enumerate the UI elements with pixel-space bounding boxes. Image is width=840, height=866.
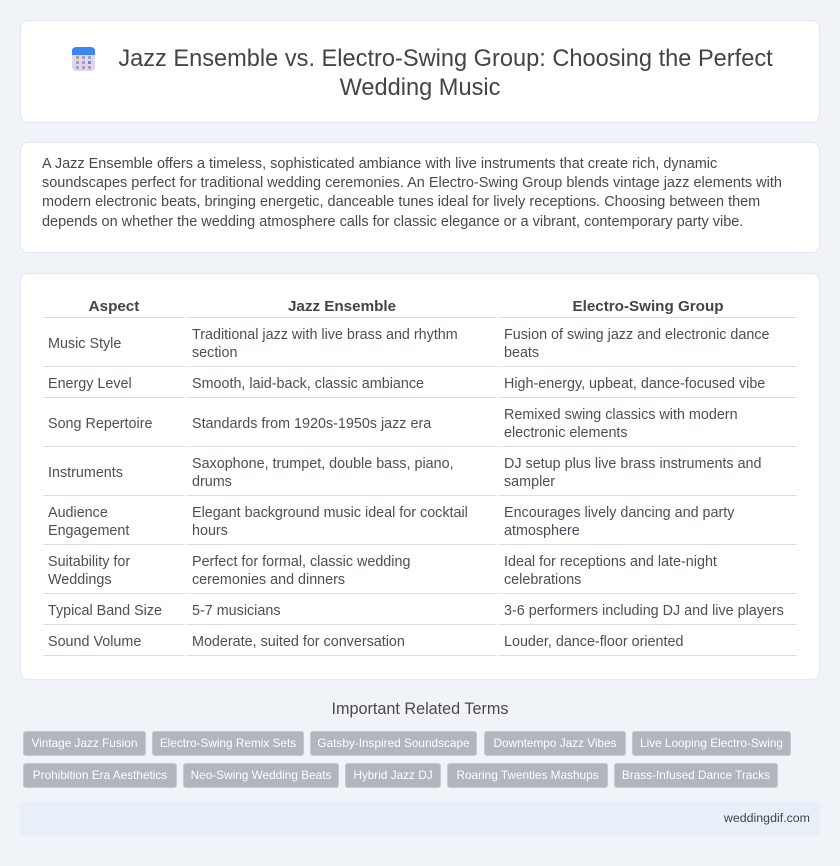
intro text xyxy=(42,156,782,230)
icon: calendar xyxy=(72,47,95,71)
row: Energy Level: Energy Level xyxy=(48,376,132,392)
tag: Prohibition Era Aesthetics xyxy=(33,768,167,782)
panel: title header xyxy=(20,20,820,123)
tag: Electro-Swing Remix Sets xyxy=(160,736,296,750)
table header: Aspect xyxy=(89,298,139,315)
row: Song Repertoire: Standards from 1920s-1950s jazz era xyxy=(192,416,431,432)
row: Audience Engagement: Engagement xyxy=(48,523,129,539)
row: Sound Volume: Moderate, suited for conversation xyxy=(192,634,405,650)
title: Wedding Music xyxy=(340,75,500,101)
row: Instruments: Saxophone, trumpet, double bass, piano, xyxy=(192,456,454,472)
row: Music Style: Music Style xyxy=(48,336,121,352)
related terms tags xyxy=(23,731,791,788)
heading: related terms: Important Related Terms xyxy=(332,700,508,718)
tag xyxy=(632,731,791,756)
row: Energy Level: Smooth, laid-back, classic ambiance xyxy=(192,376,424,392)
row: Instruments: DJ setup plus live brass instruments and xyxy=(504,456,762,472)
tag: Downtempo Jazz Vibes xyxy=(493,736,617,750)
row: Music Style: Traditional jazz with live brass and rhythm xyxy=(192,327,458,343)
tag: Hybrid Jazz DJ xyxy=(353,768,433,782)
panel: introduction xyxy=(20,142,820,253)
intro text: A Jazz Ensemble offers a timeless, sophisticated ambiance with live instruments that create rich, dynamic xyxy=(42,156,717,172)
row: Instruments: Instruments xyxy=(48,465,123,481)
row: Energy Level: High-energy, upbeat, dance-focused vibe xyxy=(504,376,765,392)
tag: Neo-Swing Wedding Beats xyxy=(191,768,331,782)
row: Music Style: Fusion of swing jazz and electronic dance xyxy=(504,327,770,343)
row: Audience Engagement: atmosphere xyxy=(504,523,580,539)
intro text: modern electronic beats, bringing energetic, danceable tunes ideal for lively receptions. Choosing between them xyxy=(42,194,760,210)
row: Audience Engagement xyxy=(48,505,734,539)
row: Suitability for Weddings: Ideal for receptions and late-night xyxy=(504,554,717,570)
row: Suitability for Weddings: Suitability for xyxy=(48,554,130,570)
title: Jazz Ensemble vs. Electro-Swing Group: Choosing the Perfect xyxy=(118,46,773,72)
row: Audience Engagement: Elegant background music ideal for cocktail xyxy=(192,505,468,521)
row: Song Repertoire: Remixed swing classics with modern xyxy=(504,407,738,423)
table header: Electro-Swing Group xyxy=(572,298,724,315)
title xyxy=(118,46,773,101)
tag: Gatsby-Inspired Soundscape xyxy=(317,736,470,750)
row: Song Repertoire xyxy=(48,407,738,441)
row: Instruments: drums xyxy=(192,474,232,490)
tag xyxy=(484,731,626,756)
footer xyxy=(20,802,820,836)
row: Typical Band Size: Typical Band Size xyxy=(48,603,162,619)
tag xyxy=(23,731,146,756)
tag xyxy=(447,763,608,788)
tag xyxy=(614,763,778,788)
panel: comparison table xyxy=(20,273,820,680)
row: Audience Engagement: Audience xyxy=(48,505,108,521)
row: Sound Volume: Louder, dance-floor oriented xyxy=(504,634,683,650)
tag xyxy=(152,731,304,756)
table header: Jazz Ensemble xyxy=(288,298,396,315)
row: Music Style: beats xyxy=(504,345,539,361)
row: Suitability for Weddings: Weddings xyxy=(48,572,112,588)
row: Suitability for Weddings: celebrations xyxy=(504,572,581,588)
tag: Roaring Twenties Mashups xyxy=(456,768,599,782)
tag: Live Looping Electro-Swing xyxy=(640,736,783,750)
tag xyxy=(310,731,477,756)
row: Suitability for Weddings xyxy=(48,554,717,588)
row: Audience Engagement: hours xyxy=(192,523,228,539)
table header xyxy=(89,298,724,315)
tag xyxy=(23,763,177,788)
row: Typical Band Size: 5-7 musicians xyxy=(192,603,280,619)
row: Song Repertoire: electronic elements xyxy=(504,425,628,441)
row: Audience Engagement: Encourages lively dancing and party xyxy=(504,505,734,521)
tag: Vintage Jazz Fusion xyxy=(31,736,138,750)
row: Song Repertoire: Song Repertoire xyxy=(48,416,152,432)
row: Sound Volume xyxy=(48,634,683,650)
row: Typical Band Size xyxy=(48,603,784,619)
footer source text: weddingdif.com xyxy=(724,811,810,825)
tag xyxy=(183,763,339,788)
row: Sound Volume: Sound Volume xyxy=(48,634,141,650)
row: Typical Band Size: 3-6 performers including DJ and live players xyxy=(504,603,784,619)
intro text: depends on whether the wedding atmosphere calls for classic elegance or a vibrant, contemporary party vibe. xyxy=(42,214,743,230)
row: Suitability for Weddings: Perfect for formal, classic wedding xyxy=(192,554,410,570)
tag xyxy=(345,763,441,788)
row: Energy Level xyxy=(48,376,765,392)
tag: Brass-Infused Dance Tracks xyxy=(622,768,770,782)
intro text: soundscapes perfect for traditional wedding ceremonies. An Electro-Swing Group blends vintage jazz elements with xyxy=(42,175,782,191)
row: Music Style xyxy=(48,327,770,361)
row: Suitability for Weddings: ceremonies and dinners xyxy=(192,572,345,588)
row: Instruments xyxy=(48,456,762,490)
row: Instruments: sampler xyxy=(504,474,555,490)
row: Music Style: section xyxy=(192,345,237,361)
